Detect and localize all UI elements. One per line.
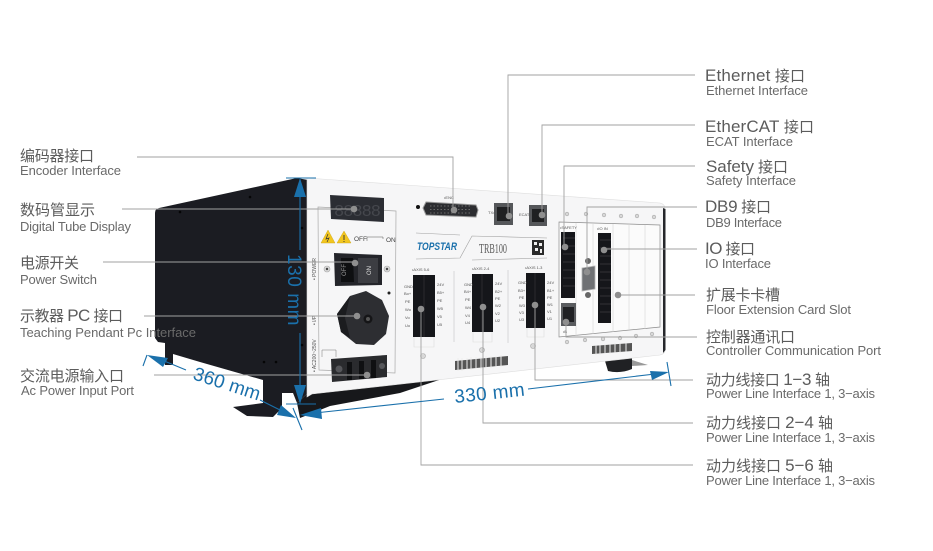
- dimension: height 130 mm: 130 mm: [283, 254, 304, 326]
- D-sub encoder connector: [416, 195, 478, 217]
- icon: warning triangles: [321, 230, 351, 243]
- left control panel outline: [318, 207, 396, 373]
- label: Safety interface: Safety Interface: [706, 173, 796, 188]
- label: AC power input port: 交流电源输入口: [20, 367, 124, 385]
- label: EtherCAT interface: [705, 117, 814, 149]
- base band under front panel: [297, 378, 445, 418]
- axis 2-4 connector: U2: [495, 318, 501, 323]
- leader line: IO: [601, 247, 697, 253]
- axis 5-6 connector: B5+: [437, 290, 445, 295]
- label: power line interface 5-6: Power Line Interface 1, 3−axis: [706, 473, 876, 488]
- axis 1-3 connector: PE: [547, 295, 553, 300]
- label: power line interface 2-4: [706, 413, 876, 445]
- Ethernet port: TX•: [488, 210, 495, 215]
- label: controller communication port: 控制器通讯口: [706, 329, 795, 346]
- chassis side panel with feet: [155, 178, 308, 417]
- side panel rivets: [179, 196, 303, 363]
- digital tube display: 88888: [334, 203, 381, 222]
- axis 1-3 connector: •AXIS 1-3: [525, 265, 543, 270]
- power switch: ON: [367, 266, 373, 275]
- label: EtherCAT interface: ECAT Interface: [706, 134, 793, 149]
- IO connector: •IO IN: [597, 226, 608, 231]
- axis 2-4 connector: •AXIS 2-4: [472, 266, 490, 271]
- controller communication port: •B: [563, 329, 567, 334]
- DB9 connector: [582, 258, 595, 298]
- off on text: [354, 236, 396, 244]
- floor extension card slot: [559, 222, 660, 337]
- leader line: AC power: [154, 372, 370, 378]
- dimension: width 330 mm: 330 mm: [453, 380, 526, 408]
- label: Ethernet interface: Ethernet Interface: [706, 83, 808, 98]
- axis 5-6 connector: [404, 267, 445, 347]
- leader line: controller communication: [563, 319, 697, 337]
- model name TRB100: TRB100: [479, 242, 507, 257]
- label: power line interface 1-3: Power Line Interface 1, 3−axis: [706, 386, 876, 401]
- label: floor extension card slot: [706, 287, 851, 317]
- label: power switch: [20, 255, 97, 287]
- QR code: [532, 240, 544, 255]
- label: AC power input port: Ac Power Input Port: [21, 383, 134, 398]
- off on text: ON: [386, 237, 396, 244]
- controller communication port: [561, 303, 576, 334]
- label: teaching pendant PC interface: Teaching Pendant Pc Interface: [20, 325, 196, 340]
- axis 1-3 connector: U3: [519, 317, 525, 322]
- EtherCAT port: [519, 205, 547, 226]
- label: power line interface 1-3: 动力线接口 1−3 轴: [706, 370, 830, 389]
- leader line: power line 5-6: [418, 306, 693, 465]
- label: IO interface: IO 接口: [705, 239, 755, 258]
- label: DB9 interface: [705, 197, 782, 230]
- label: Ethernet interface: [705, 66, 808, 98]
- axis 2-4 connector: PE: [495, 296, 501, 301]
- axis 2-4 connector: V2: [495, 311, 501, 316]
- axis 5-6 connector: GND: [404, 284, 413, 289]
- IO connector: [597, 226, 611, 323]
- axis 1-3 connector: GND: [518, 280, 527, 285]
- axis 5-6 connector: Uo: [405, 323, 411, 328]
- axis 1-3 connector: U1: [547, 316, 553, 321]
- logo: TOPSTAR: [416, 233, 547, 260]
- label: controller communication port: Controller Communication Port: [706, 343, 881, 358]
- leader line: extension slot: [615, 292, 695, 298]
- side labels on panel: • AC200~250V: [312, 339, 318, 372]
- dimension: width 330 mm: [300, 362, 671, 419]
- digital tube display: [330, 195, 384, 222]
- logo: TOPSTAR: TOPSTAR: [417, 241, 457, 253]
- leader line: digital tube: [122, 206, 357, 212]
- axis 5-6 connector: PE: [405, 299, 411, 304]
- safety connector: [560, 225, 577, 298]
- label: digital tube display: [20, 202, 132, 234]
- axis 5-6 connector: Bo+: [404, 291, 412, 296]
- axis 1-3 connector: V1: [547, 309, 553, 314]
- off on text: OFF: [354, 236, 367, 243]
- label: power switch: Power Switch: [20, 272, 97, 287]
- axis 5-6 connector: Wo: [405, 307, 412, 312]
- label: floor extension card slot: Floor Extension Card Slot: [706, 302, 851, 317]
- teaching pendant round connector: [337, 291, 390, 345]
- side labels on panel: [312, 258, 318, 372]
- axis 5-6 connector: V5: [437, 314, 443, 319]
- axis 1-3 connector: B1+: [547, 288, 555, 293]
- label: Ethernet interface: Ethernet 接口: [705, 66, 805, 85]
- axis 2-4 connector: B4+: [464, 289, 472, 294]
- label: digital tube display: 数码管显示: [20, 202, 95, 219]
- leader line: EtherCAT: [539, 125, 695, 218]
- axis 2-4 connector: PE: [465, 297, 471, 302]
- leader line: encoder: [137, 157, 457, 213]
- AC power connector: [322, 350, 387, 382]
- label: Safety interface: Safety 接口: [706, 157, 788, 176]
- dimension: depth 360 mm: 360 mm: [190, 364, 264, 405]
- axis 1-3 connector: W3: [519, 303, 526, 308]
- axis 5-6 connector: •AXIS 5-6: [412, 267, 430, 272]
- label: power line interface 1-3: [706, 370, 876, 401]
- axis 1-3 connector: V3: [519, 310, 525, 315]
- label: IO interface: [705, 239, 771, 271]
- power switch: OFF: [342, 264, 348, 276]
- axis 2-4 connector: V4: [465, 313, 471, 318]
- side labels on panel: • POWER: [312, 258, 318, 280]
- leader line: teaching pendant: [144, 313, 360, 319]
- label: EtherCAT interface: EtherCAT 接口: [705, 117, 814, 136]
- EtherCAT port: ECAT•: [519, 212, 531, 217]
- label: power line interface 2-4: Power Line Interface 1, 3−axis: [706, 430, 876, 445]
- Ethernet port: [488, 203, 513, 225]
- label: power line interface 5-6: [706, 456, 876, 488]
- axis 1-3 connector: [518, 265, 555, 337]
- leader line: Ethernet: [506, 75, 695, 219]
- axis 2-4 connector: U4: [465, 320, 471, 325]
- axis 2-4 connector: GND: [464, 282, 473, 287]
- axis 2-4 connector: 24V: [495, 281, 502, 286]
- leader line: DB9: [584, 207, 697, 275]
- label: encoder interface: [20, 148, 121, 178]
- label: DB9 interface: DB9 Interface: [706, 215, 782, 230]
- label: teaching pendant PC interface: 示教器 PC 接口: [20, 306, 123, 325]
- axis 2-4 connector: W4: [465, 305, 472, 310]
- leader line: power line 2-4: [480, 304, 693, 423]
- label: encoder interface: 编码器接口: [20, 148, 94, 165]
- dividers: [454, 270, 508, 343]
- axis 2-4 connector: W2: [495, 303, 502, 308]
- safety connector: •SAFETY: [560, 225, 577, 230]
- leader line: power line 1-3: [532, 302, 693, 380]
- axis 5-6 connector: U5: [437, 322, 443, 327]
- leader line: Safety: [562, 166, 695, 250]
- axis 2-4 connector: [464, 266, 503, 342]
- label: AC power input port: [20, 367, 134, 398]
- D-sub encoder connector: •ENC: [444, 195, 454, 200]
- axis 2-4 connector: B2+: [495, 289, 503, 294]
- axis 5-6 connector: PE: [437, 298, 443, 303]
- dimension: depth 360 mm: [143, 355, 302, 430]
- axis 5-6 connector: Vo: [405, 315, 410, 320]
- label: controller communication port: [706, 329, 881, 358]
- label: encoder interface: Encoder Interface: [20, 163, 121, 178]
- white front panel: [307, 178, 665, 397]
- axis 1-3 connector: PE: [519, 295, 525, 300]
- axis 5-6 connector: 24V: [437, 282, 444, 287]
- axis 5-6 connector: W5: [437, 306, 444, 311]
- label: Safety interface: [706, 157, 796, 188]
- label: power line interface 5-6: 动力线接口 5−6 轴: [706, 456, 833, 475]
- axis 1-3 connector: W1: [547, 302, 554, 307]
- leader line: power switch: [103, 260, 358, 266]
- label: floor extension card slot: 扩展卡卡槽: [706, 287, 780, 304]
- label: IO interface: IO Interface: [705, 256, 771, 271]
- barcodes: [455, 343, 632, 371]
- power switch: [334, 253, 382, 286]
- right rubber foot: [605, 358, 648, 372]
- label: power switch: 电源开关: [20, 255, 79, 272]
- controller product photo: [155, 178, 666, 418]
- axis 1-3 connector: 24V: [547, 280, 554, 285]
- label: teaching pendant PC interface: [20, 306, 196, 340]
- label: digital tube display: Digital Tube Display: [20, 219, 132, 234]
- slot screws: [565, 212, 656, 344]
- side labels on panel: • I/P: [312, 315, 318, 325]
- label: power line interface 2-4: 动力线接口 2−4 轴: [706, 413, 833, 432]
- dimension: height 130 mm: [283, 178, 316, 404]
- axis 1-3 connector: B3+: [518, 288, 526, 293]
- label: DB9 interface: DB9 接口: [705, 197, 771, 216]
